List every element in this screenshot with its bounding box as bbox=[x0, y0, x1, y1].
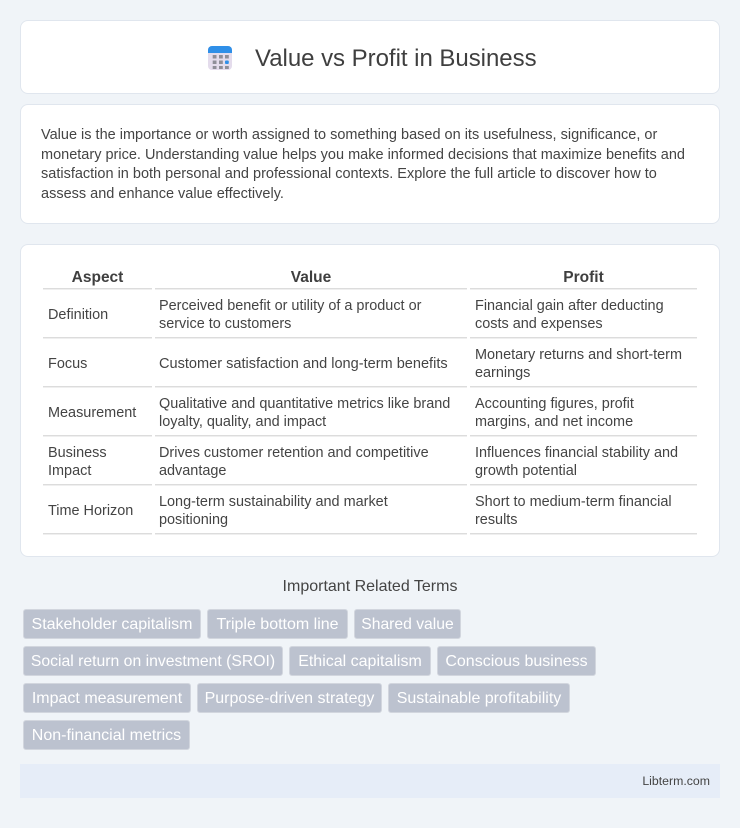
title: Value vs Profit in Business bbox=[255, 45, 537, 72]
row: business impact bbox=[48, 445, 107, 479]
intro text: satisfaction in both personal and professional contexts. Explore the full article to discover how to bbox=[41, 166, 657, 182]
comparison table: results bbox=[475, 512, 518, 528]
comparison table: growth potential bbox=[475, 463, 577, 479]
panel: header bbox=[20, 20, 720, 94]
row: time horizon: Time Horizon bbox=[48, 503, 133, 519]
tag list: Social return on investment (SROI) bbox=[31, 653, 275, 670]
comparison table: Perceived benefit or utility of a product or bbox=[159, 298, 421, 314]
comparison table: Accounting figures, profit bbox=[475, 396, 634, 412]
tag list bbox=[23, 609, 596, 750]
footer bbox=[20, 764, 720, 798]
comparison table: Value bbox=[291, 269, 331, 286]
comparison table: Long-term sustainability and market bbox=[159, 494, 388, 510]
comparison table: advantage bbox=[159, 463, 226, 479]
tag list: Triple bottom line bbox=[216, 616, 339, 633]
heading: related terms: Important Related Terms bbox=[283, 578, 457, 595]
panel: introduction bbox=[20, 104, 720, 224]
comparison table: Short to medium-term financial bbox=[475, 494, 672, 510]
comparison table: margins, and net income bbox=[475, 414, 633, 430]
table header bbox=[72, 269, 604, 286]
intro text: monetary price. Understanding value helps you make informed decisions that maximize benefits and bbox=[41, 146, 685, 162]
panel: comparison table bbox=[20, 244, 720, 557]
comparison table: Profit bbox=[563, 269, 604, 286]
intro text: assess and enhance value effectively. bbox=[41, 186, 284, 202]
comparison table: Aspect bbox=[72, 269, 123, 286]
tag list: Ethical capitalism bbox=[298, 653, 422, 670]
comparison table: Qualitative and quantitative metrics like brand bbox=[159, 396, 450, 412]
row: focus: Focus bbox=[48, 356, 87, 372]
comparison table: service to customers bbox=[159, 316, 291, 332]
footer link: Libterm.com bbox=[642, 774, 710, 788]
comparison table: Influences financial stability and bbox=[475, 445, 678, 461]
comparison table: Drives customer retention and competitive bbox=[159, 445, 429, 461]
comparison table: earnings bbox=[475, 365, 530, 381]
row: measurement: Measurement bbox=[48, 405, 136, 421]
intro text: Value is the importance or worth assigned to something based on its usefulness, significance, or bbox=[41, 127, 657, 143]
tag list: Sustainable profitability bbox=[397, 690, 561, 707]
intro text bbox=[41, 127, 685, 202]
comparison table: Customer satisfaction and long-term benefits bbox=[159, 356, 448, 372]
tag list: Non-financial metrics bbox=[32, 727, 181, 744]
comparison table bbox=[43, 269, 697, 535]
row: business impact: Impact bbox=[48, 463, 91, 479]
tag list: Purpose-driven strategy bbox=[205, 690, 374, 707]
row: definition: Definition bbox=[48, 307, 108, 323]
tag list: Stakeholder capitalism bbox=[32, 616, 192, 633]
icon: calendar bbox=[208, 46, 232, 70]
tag list: Shared value bbox=[361, 616, 454, 633]
tag list: Impact measurement bbox=[32, 690, 182, 707]
comparison table: loyalty, quality, and impact bbox=[159, 414, 326, 430]
comparison table: Monetary returns and short-term bbox=[475, 347, 682, 363]
comparison table: costs and expenses bbox=[475, 316, 603, 332]
comparison table: positioning bbox=[159, 512, 228, 528]
comparison table: Financial gain after deducting bbox=[475, 298, 664, 314]
row: business impact: Business bbox=[48, 445, 107, 461]
tag list: Conscious business bbox=[445, 653, 588, 670]
